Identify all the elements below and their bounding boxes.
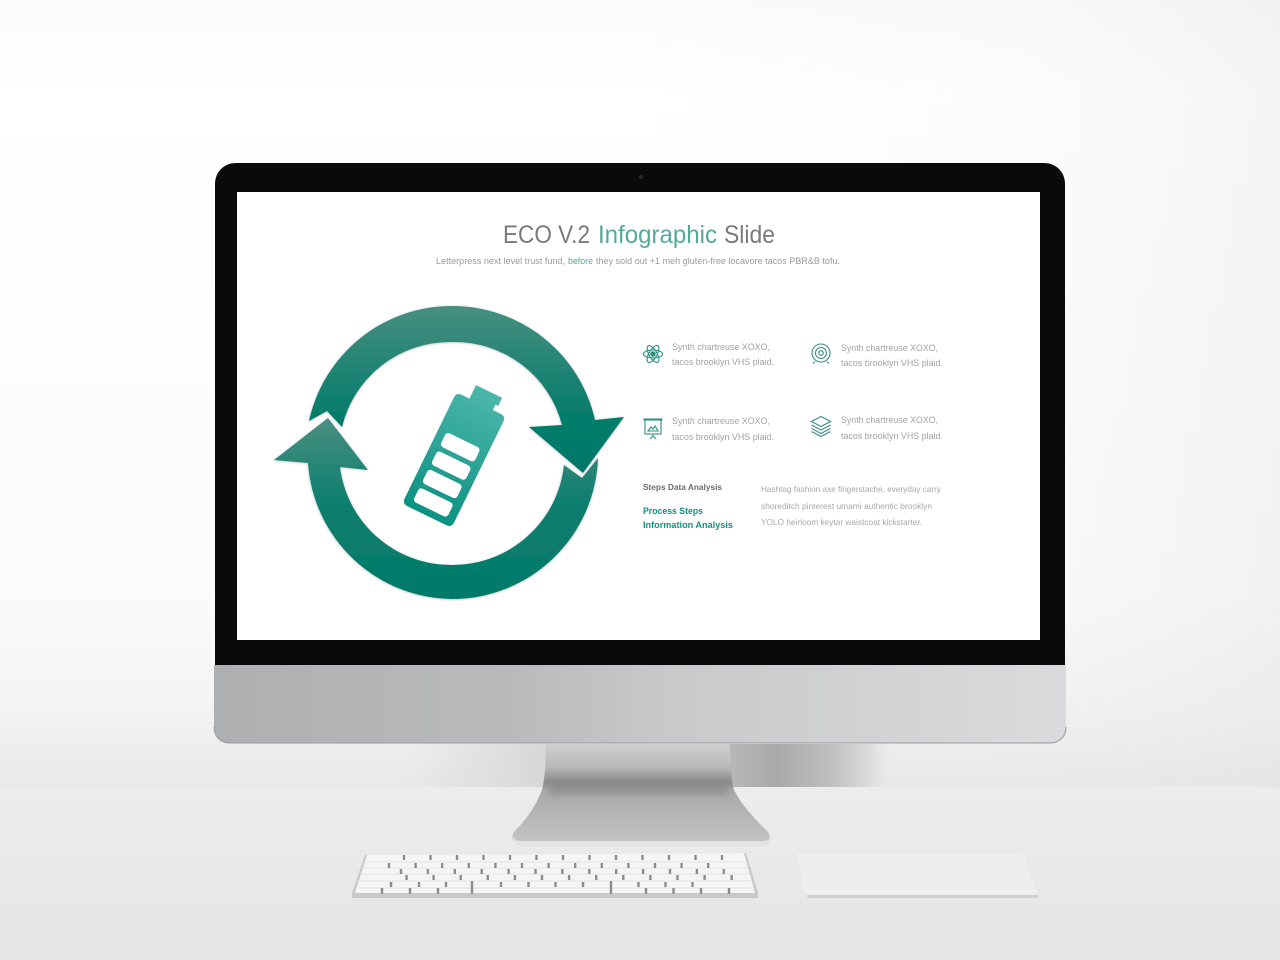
stand shadow on wall right xyxy=(728,744,893,787)
base rim xyxy=(513,836,771,846)
stand shadow on wall left xyxy=(400,744,548,787)
process steps heading xyxy=(643,506,733,531)
screen xyxy=(237,192,1040,640)
trackpad surface xyxy=(797,853,1038,895)
monitor chin xyxy=(214,665,1066,743)
trackpad xyxy=(797,853,1038,898)
chin rim xyxy=(214,727,1066,743)
top arrow xyxy=(309,306,624,473)
description paragraph xyxy=(761,484,942,527)
monitor xyxy=(214,163,1066,743)
slide subtitle xyxy=(436,256,840,266)
description paragraph: YOLO heirloom keytar waistcoat kickstarter. xyxy=(761,517,922,527)
slide title: ECO V.2 xyxy=(503,221,590,249)
description paragraph: shoreditch pinterest umami authentic brooklyn xyxy=(761,501,932,511)
feature text 2 xyxy=(841,343,943,368)
keyboard rim xyxy=(352,853,758,898)
desk surface xyxy=(0,787,1280,960)
process steps heading: Process Steps xyxy=(643,506,703,517)
slide title: Slide xyxy=(724,221,775,249)
stand base xyxy=(512,790,770,844)
monitor stand xyxy=(512,744,771,846)
feature text 4: Synth chartreuse XOXO, xyxy=(841,415,938,425)
slide subtitle: before xyxy=(568,256,593,266)
slide title xyxy=(503,221,775,249)
process steps heading: Information Analysis xyxy=(643,520,733,531)
key row lines xyxy=(356,862,753,888)
icon: layers xyxy=(812,416,830,436)
feature text 3: Synth chartreuse XOXO, xyxy=(672,416,770,426)
slide subtitle: they sold out +1 meh gluten-free locavore tacos PBR&B tofu. xyxy=(596,256,840,266)
recycling arrows ring xyxy=(274,306,624,599)
feature text 1: Synth chartreuse XOXO, xyxy=(672,342,770,352)
trackpad rim xyxy=(805,893,1038,898)
stand neck xyxy=(542,744,734,790)
stand shadow band xyxy=(550,783,728,795)
feature text 4: tacos brooklyn VHS plaid. xyxy=(841,431,943,441)
icon: presentation board xyxy=(644,420,662,439)
key gaps xyxy=(382,855,732,894)
steps data heading: Steps Data Analysis xyxy=(643,482,722,492)
battery body xyxy=(402,379,512,528)
feature text 3: tacos brooklyn VHS plaid. xyxy=(672,432,774,442)
feature text 1 xyxy=(672,342,774,367)
feature text 1: tacos brooklyn VHS plaid. xyxy=(672,357,774,367)
bottom arrow xyxy=(274,418,598,599)
icon: target xyxy=(812,344,830,364)
slide title: Infographic xyxy=(598,221,717,249)
keyboard xyxy=(352,853,758,898)
slide subtitle: Letterpress next level trust fund, xyxy=(436,256,565,266)
icon: battery xyxy=(402,379,512,528)
icon: atom xyxy=(644,344,662,364)
description paragraph: Hashtag fashion axe fingerstache, everyday carry xyxy=(761,484,942,494)
keyboard keys xyxy=(355,853,755,893)
feature text 2: tacos brooklyn VHS plaid. xyxy=(841,358,943,368)
battery cells xyxy=(413,432,481,518)
monitor bezel xyxy=(215,163,1065,665)
webcam xyxy=(639,175,643,179)
feature text 4 xyxy=(841,415,943,441)
feature text 3 xyxy=(672,416,774,442)
feature text 2: Synth chartreuse XOXO, xyxy=(841,343,938,353)
